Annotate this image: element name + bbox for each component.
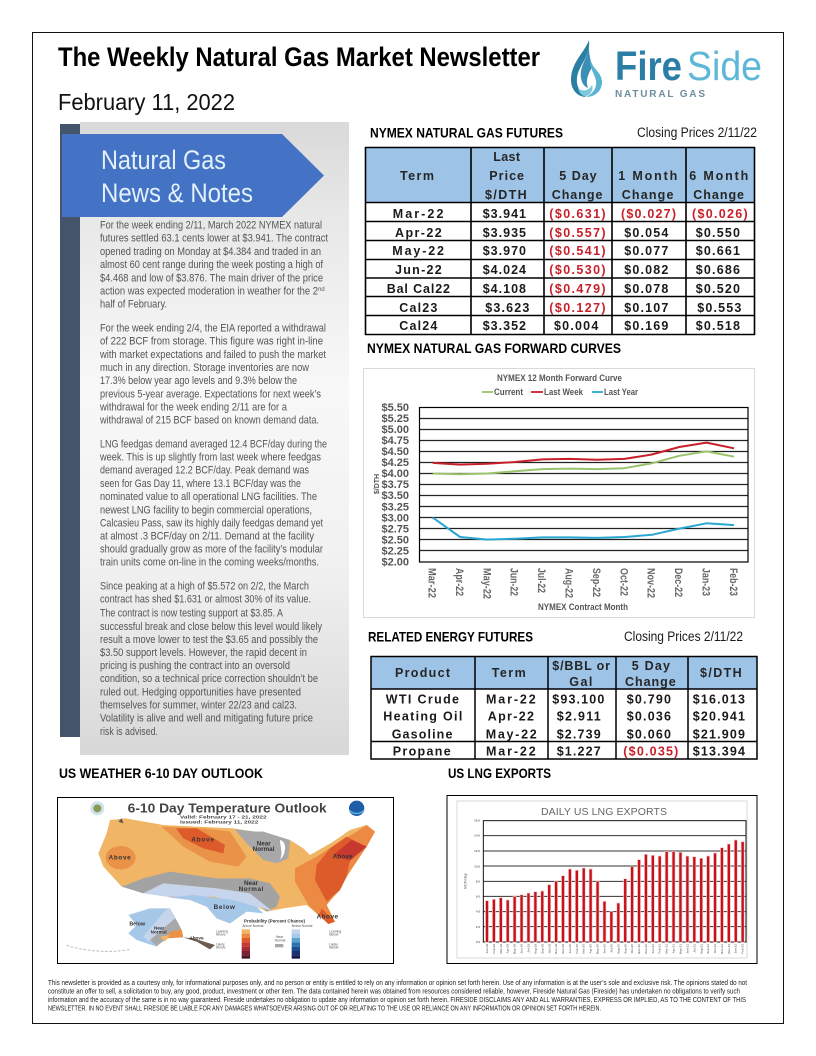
x axis month labels: Feb-21 bbox=[658, 944, 662, 954]
x axis month labels: Nov-19 bbox=[554, 944, 558, 954]
table rows: $93.100 bbox=[552, 692, 604, 706]
table rows: $0.082 bbox=[624, 263, 668, 277]
table rows: $0.661 bbox=[696, 244, 740, 258]
y axis labels: $2.00 bbox=[381, 556, 409, 568]
table rows: $0.078 bbox=[624, 282, 668, 296]
text block: LNG feedgas demand: week. This is up slightly from last week where feedgas bbox=[99, 452, 321, 464]
x axis month labels: Feb-22 bbox=[741, 944, 745, 954]
text block: LNG feedgas demand: newest LNG facility to begin commercial operations, bbox=[100, 504, 312, 516]
map region labels: Above bbox=[109, 855, 131, 862]
text block: LNG feedgas demand: should gradually grow as more of the facility’s modular bbox=[100, 544, 323, 556]
x axis month labels: Apr-20 bbox=[589, 944, 593, 953]
map region labels: Below bbox=[214, 904, 235, 911]
x axis month labels: Feb-20 bbox=[575, 944, 579, 954]
map probability legend: Above bbox=[216, 945, 226, 949]
closing prices note: Closing Prices 2/11/22 bbox=[637, 125, 757, 140]
closing prices note: Closing Prices 2/11/22 bbox=[624, 629, 743, 644]
map title: Issued: February 11, 2022 bbox=[180, 819, 259, 825]
chart title: NYMEX 12 Month Forward Curve bbox=[497, 373, 622, 384]
table rows: ($0.027) bbox=[621, 207, 676, 221]
text block: storage report: previous 5-year average. Expectations for next week’s bbox=[100, 388, 321, 400]
text block: weekly settlement: $4.468 and low of $3.876. The main driver of the price bbox=[100, 272, 323, 284]
text block: LNG feedgas demand: at almost .3 BCF/day on 2/11. Demand at the facility bbox=[100, 530, 315, 542]
table rows: Propane bbox=[393, 744, 451, 758]
table rows: May-22 bbox=[392, 244, 444, 258]
table rows: Bal Cal22 bbox=[387, 282, 450, 296]
map region labels: Normal bbox=[253, 846, 275, 853]
map region labels: Above bbox=[189, 936, 204, 941]
map probability legend: Normal bbox=[275, 938, 286, 942]
x axis month labels: Jun-20 bbox=[602, 944, 606, 954]
text block: weekly settlement: nd bbox=[318, 287, 325, 293]
map region labels bbox=[109, 837, 353, 941]
heading: LNG exports: US LNG EXPORTS bbox=[448, 765, 551, 781]
y axis title: BCF/day bbox=[463, 873, 468, 889]
x axis month labels: Sep-20 bbox=[623, 944, 627, 954]
series: last week bbox=[433, 443, 734, 465]
table rows: $2.911 bbox=[557, 710, 601, 724]
x axis month labels: Aug-21 bbox=[699, 944, 703, 954]
x axis month labels: Jul-19 bbox=[526, 944, 530, 953]
chart legend: Last Week bbox=[544, 387, 584, 398]
y axis labels: $2.25 bbox=[381, 545, 409, 557]
icon: NOAA seal bbox=[349, 801, 364, 816]
y axis labels: 14.0 bbox=[474, 834, 480, 838]
table header: Term bbox=[492, 666, 526, 680]
y axis labels bbox=[474, 819, 480, 944]
x axis month labels: Apr-21 bbox=[672, 944, 676, 953]
text block: technical outlook: Since peaking at a high of $5.572 on 2/2, the March bbox=[100, 580, 309, 592]
map region labels: Above bbox=[317, 914, 338, 921]
text block: technical outlook: ruled out. Hedging opportunities have presented bbox=[100, 686, 301, 698]
table rows: ($0.631) bbox=[549, 207, 606, 221]
chart legend: Current bbox=[494, 387, 524, 398]
text block: technical outlook: contract has shed $1.631 or almost 30% of its value. bbox=[100, 594, 311, 606]
map probability legend: Leaning bbox=[216, 930, 228, 934]
map region labels: Near bbox=[154, 925, 165, 930]
table rows: $0.790 bbox=[627, 692, 671, 706]
x axis month labels bbox=[485, 944, 745, 954]
y axis labels: $5.50 bbox=[381, 402, 409, 414]
y axis labels: $3.00 bbox=[381, 512, 409, 524]
table header: 5 Day bbox=[559, 169, 597, 183]
table header bbox=[400, 150, 748, 202]
x axis month labels: Oct-20 bbox=[630, 944, 634, 953]
table rows: $3.970 bbox=[483, 244, 526, 258]
icon: flame bbox=[571, 40, 602, 97]
x axis month labels: Oct-21 bbox=[713, 944, 717, 953]
table rows: Jun-22 bbox=[395, 263, 442, 277]
table header: $/BBL or bbox=[552, 659, 610, 673]
map region labels: Normal bbox=[151, 930, 167, 935]
text block: storage report: much in any direction. Storage inventories are now bbox=[100, 362, 309, 374]
table: related energy futures bbox=[370, 656, 758, 760]
table: NYMEX natural gas futures bbox=[365, 147, 755, 335]
table rows: ($0.035) bbox=[623, 744, 678, 758]
x axis month labels: Jun-19 bbox=[520, 944, 524, 954]
table rows: ($0.557) bbox=[549, 226, 606, 240]
map title: Valid: February 17 - 21, 2022 bbox=[180, 815, 267, 821]
table header: Product bbox=[395, 666, 451, 680]
series: last year bbox=[433, 518, 734, 540]
x axis month labels: Aug-20 bbox=[616, 944, 620, 954]
x axis month labels: Nov-20 bbox=[637, 944, 641, 954]
table rows: ($0.026) bbox=[692, 207, 748, 221]
map title: 6-10 Day Temperature Outlook bbox=[128, 801, 327, 816]
table rows bbox=[383, 692, 745, 758]
map title bbox=[128, 801, 327, 825]
table rows: Apr-22 bbox=[488, 710, 534, 724]
text block: weekly settlement: almost 60 cent range during the week posting a high of bbox=[100, 259, 323, 271]
y axis labels: 0.0 bbox=[476, 940, 480, 944]
y axis labels: $3.75 bbox=[381, 479, 409, 491]
table rows: $0.553 bbox=[697, 301, 741, 315]
table rows: $16.013 bbox=[693, 692, 745, 706]
table rows: $0.036 bbox=[627, 710, 671, 724]
table header bbox=[395, 659, 742, 689]
text block: weekly settlement: For the week ending 2/11, March 2022 NYMEX natural bbox=[100, 220, 322, 232]
text block: technical outlook: pricing is pushing the contract into an oversold bbox=[100, 660, 290, 672]
y axis labels: $4.50 bbox=[381, 446, 409, 458]
banner arrow: News & Notes bbox=[101, 178, 253, 208]
x axis month labels: Dec-21 bbox=[727, 944, 731, 954]
text block: storage report bbox=[99, 322, 326, 427]
table rows: $3.935 bbox=[483, 226, 526, 240]
table rows: Mar-22 bbox=[393, 207, 443, 221]
text block: technical outlook: $3.50 support levels. However, the rapid decent in bbox=[100, 647, 307, 659]
x axis month labels: Apr-22 bbox=[453, 568, 465, 596]
y axis labels: $4.75 bbox=[381, 435, 409, 447]
table header: 1 Month bbox=[618, 169, 677, 183]
table header: Change bbox=[552, 188, 602, 202]
map probability legend: Below Normal bbox=[292, 924, 313, 928]
table rows: Apr-22 bbox=[395, 226, 442, 240]
bars bbox=[486, 840, 744, 942]
table rows bbox=[387, 207, 748, 333]
text block: storage report: of 222 BCF from storage. This figure was right in-line bbox=[100, 336, 323, 348]
table rows: Gasoline bbox=[392, 728, 452, 742]
x axis month labels: Oct-22 bbox=[617, 568, 629, 596]
x axis month labels: Jul-21 bbox=[692, 944, 696, 953]
table rows: $0.107 bbox=[624, 301, 668, 315]
line chart: NYMEX 12 month forward curve bbox=[364, 368, 754, 618]
table rows: Cal23 bbox=[399, 301, 437, 315]
disclaimer: NEWSLETTER. IN NO EVENT SHALL FIRESIDE BE LIABLE FOR ANY DAMAGES WHATSOEVER ARISING OUT OF OR RELATING TO THE USE OR RELIANCE ON ANY INFORMATION OR OPINION SET FORTH HEREIN. bbox=[48, 1004, 601, 1012]
text block: technical outlook: risk is advised. bbox=[100, 726, 158, 738]
table rows: $20.941 bbox=[693, 710, 745, 724]
table rows: $4.024 bbox=[483, 263, 526, 277]
y axis labels: 8.0 bbox=[476, 879, 480, 883]
table rows: $0.550 bbox=[696, 226, 740, 240]
heading: weather outlook: US WEATHER 6-10 DAY OUTLOOK bbox=[59, 765, 263, 781]
x axis title: NYMEX Contract Month bbox=[538, 602, 628, 613]
table header: 6 Month bbox=[689, 169, 748, 183]
heading: NYMEX futures: NYMEX NATURAL GAS FUTURES bbox=[370, 124, 563, 140]
logo: FireSide Natural Gas: NATURAL GAS bbox=[615, 89, 705, 100]
text block: technical outlook: Volatility is alive and well and mitigating future price bbox=[100, 713, 313, 725]
table rows: ($0.127) bbox=[549, 301, 606, 315]
text block: LNG feedgas demand: LNG feedgas demand averaged 12.4 BCF/day during the bbox=[100, 438, 327, 450]
x axis month labels: Nov-21 bbox=[720, 944, 724, 954]
table rows: ($0.541) bbox=[549, 244, 606, 258]
table rows: $4.108 bbox=[483, 282, 526, 296]
banner arrow: Natural Gas bbox=[101, 145, 226, 175]
heading: related energy futures: RELATED ENERGY FUTURES bbox=[368, 628, 533, 644]
x axis month labels: Mar-21 bbox=[665, 944, 669, 954]
y axis labels: 4.0 bbox=[476, 910, 480, 914]
table rows: $0.520 bbox=[696, 282, 740, 296]
table rows: $0.060 bbox=[627, 728, 671, 742]
map: Alaska bbox=[67, 908, 215, 951]
table rows: $3.941 bbox=[483, 207, 526, 221]
text block: LNG feedgas demand: seen for Gas Day 11, where 13.1 BCF/day was the bbox=[100, 478, 301, 490]
table rows: Heating Oil bbox=[383, 710, 462, 724]
x axis month labels: Dec-20 bbox=[644, 944, 648, 954]
table header: Last bbox=[493, 150, 521, 164]
y axis title: $/DTH bbox=[374, 474, 381, 494]
table rows: $13.394 bbox=[693, 744, 745, 758]
icon: NWS seal bbox=[90, 801, 104, 815]
x axis month labels: Dec-19 bbox=[561, 944, 565, 954]
map: 6-10 day temperature outlook bbox=[58, 798, 394, 964]
x axis month labels: Jul-20 bbox=[609, 944, 613, 953]
x axis month labels: Jan-21 bbox=[651, 944, 655, 953]
table rows: WTI Crude bbox=[386, 692, 459, 706]
x axis month labels: Jan-23 bbox=[699, 568, 711, 596]
y axis labels bbox=[381, 402, 409, 568]
map probability legend: Above bbox=[216, 933, 226, 937]
x axis month labels: Aug-22 bbox=[562, 568, 574, 598]
map: contiguous states bbox=[98, 818, 375, 924]
y axis labels: 6.0 bbox=[476, 895, 480, 899]
map probability legend: Below bbox=[329, 945, 339, 949]
table header: $/DTH bbox=[485, 188, 527, 202]
chart legend bbox=[482, 387, 638, 398]
map region labels: Near bbox=[244, 880, 259, 887]
y axis labels: $5.25 bbox=[381, 413, 409, 425]
text block: storage report: with market expectations and failed to push the market bbox=[99, 349, 326, 361]
table header: $/DTH bbox=[700, 666, 742, 680]
x axis month labels: Nov-22 bbox=[645, 568, 657, 598]
table rows: $0.518 bbox=[696, 319, 740, 333]
text block: technical outlook bbox=[100, 580, 323, 738]
table rows: May-22 bbox=[486, 728, 537, 742]
text block: weekly settlement: opened trading on Monday at $4.384 and traded in an bbox=[100, 246, 321, 258]
text block: technical outlook: result a move lower to test the $3.65 and possibly the bbox=[100, 634, 318, 646]
y axis labels: $3.25 bbox=[381, 501, 409, 513]
text block: weekly settlement bbox=[100, 220, 328, 311]
x axis month labels: Jan-19 bbox=[485, 944, 489, 953]
table rows: $0.004 bbox=[554, 319, 598, 333]
x axis month labels: Jul-22 bbox=[535, 568, 547, 593]
series: current bbox=[433, 451, 734, 474]
title: The Weekly Natural Gas Market Newsletter bbox=[58, 42, 540, 72]
map probability legend: Probability (Percent Chance) bbox=[244, 919, 306, 924]
text block: storage report: withdrawal of 215 BCF based on known demand data. bbox=[99, 415, 319, 427]
chart legend: Last Year bbox=[604, 387, 638, 398]
map probability legend: Near bbox=[276, 935, 284, 939]
text block: technical outlook: The contract is now testing support at $3.85. A bbox=[100, 608, 284, 620]
x axis month labels: Oct-19 bbox=[547, 944, 551, 953]
text block: LNG feedgas demand: demand averaged 12.2 BCF/day. Peak demand was bbox=[100, 465, 309, 477]
map region labels: Above bbox=[333, 854, 353, 861]
text block: LNG feedgas demand: Calcasieu Pass, saw its highly daily feedgas demand yet bbox=[100, 517, 323, 529]
disclaimer bbox=[48, 978, 748, 1012]
y axis labels: $4.00 bbox=[381, 468, 409, 480]
table rows: $1.227 bbox=[557, 744, 601, 758]
y axis labels: $5.00 bbox=[381, 424, 409, 436]
table header: Change bbox=[622, 188, 673, 202]
x axis month labels: Sep-21 bbox=[706, 944, 710, 954]
table header: Gal bbox=[569, 675, 592, 689]
table rows: $2.739 bbox=[557, 728, 601, 742]
y axis labels: 10.0 bbox=[474, 864, 480, 868]
text block: LNG feedgas demand: train units come on-line in the coming weeks/months. bbox=[100, 556, 319, 568]
table rows: $0.686 bbox=[696, 263, 740, 277]
map probability legend: Leaning bbox=[329, 930, 341, 934]
text block: LNG feedgas demand bbox=[99, 438, 327, 568]
map probability legend: Likely bbox=[216, 942, 225, 946]
y axis labels: $3.50 bbox=[381, 490, 409, 502]
table rows: $21.909 bbox=[693, 728, 745, 742]
x axis month labels: May-19 bbox=[513, 944, 517, 954]
map region labels: Normal bbox=[239, 886, 264, 893]
map region labels: Near bbox=[257, 841, 271, 848]
table rows: $0.054 bbox=[624, 226, 668, 240]
text block: storage report: 17.3% below year ago levels and 9.3% below the bbox=[100, 375, 297, 387]
x axis month labels: Jan-20 bbox=[568, 944, 572, 953]
map region labels: Below bbox=[129, 922, 146, 928]
table rows: $0.077 bbox=[624, 244, 668, 258]
panel: natural gas news and notes bbox=[60, 122, 349, 755]
table rows: ($0.479) bbox=[549, 282, 606, 296]
x axis month labels: Sep-22 bbox=[590, 568, 602, 597]
y axis labels: 12.0 bbox=[474, 849, 480, 853]
logo: FireSide Natural Gas: Side bbox=[687, 43, 762, 89]
x axis month labels: Jan-22 bbox=[734, 944, 738, 953]
text block: technical outlook: successful break and close below this level would likely bbox=[100, 621, 323, 633]
logo: FireSide Natural Gas bbox=[571, 40, 762, 100]
map probability legend: Above Normal bbox=[242, 924, 264, 928]
table rows: Mar-22 bbox=[486, 744, 536, 758]
x axis month labels: Aug-19 bbox=[533, 944, 537, 954]
date: February 11, 2022 bbox=[58, 89, 235, 115]
x axis month labels: Dec-22 bbox=[672, 568, 684, 597]
text block: storage report: withdrawal for the week ending 2/11 are for a bbox=[99, 402, 287, 414]
text block: weekly settlement: half of February. bbox=[100, 299, 167, 311]
logo: FireSide Natural Gas: Fire bbox=[615, 43, 682, 89]
text block: technical outlook: themselves for summer, winter 22/23 and cal23. bbox=[100, 700, 297, 712]
x axis month labels: May-22 bbox=[480, 568, 492, 599]
map probability legend bbox=[216, 919, 341, 959]
text block: technical outlook: condition, so a technical price correction shouldn’t be bbox=[100, 673, 318, 685]
x axis month labels: Jun-21 bbox=[685, 944, 689, 954]
table rows: ($0.530) bbox=[549, 263, 606, 277]
table rows: Cal24 bbox=[399, 319, 437, 333]
x axis month labels: Mar-20 bbox=[582, 944, 586, 954]
bar chart: daily US LNG exports bbox=[447, 796, 757, 964]
text block: weekly settlement: action was expected moderation in weather for the 2 bbox=[100, 286, 318, 298]
x axis month labels: Mar-19 bbox=[499, 944, 503, 954]
table rows: $3.623 bbox=[485, 301, 529, 315]
y axis labels: $2.50 bbox=[381, 534, 409, 546]
y axis labels: $2.75 bbox=[381, 523, 409, 535]
x axis month labels: Feb-23 bbox=[727, 568, 739, 596]
text block: storage report: For the week ending 2/4, the EIA reported a withdrawal bbox=[100, 322, 326, 334]
chart title: DAILY US LNG EXPORTS bbox=[541, 806, 667, 818]
map region labels: Above bbox=[191, 837, 214, 844]
text block: LNG feedgas demand: nominated value to all operational LNG facilities. The bbox=[100, 491, 317, 503]
x axis month labels: Feb-19 bbox=[492, 944, 496, 954]
table header: Change bbox=[625, 675, 676, 689]
x axis month labels bbox=[426, 568, 739, 599]
x axis month labels: Mar-22 bbox=[426, 568, 438, 598]
table rows: Mar-22 bbox=[486, 692, 536, 706]
table header: 5 Day bbox=[632, 659, 670, 673]
heading: forward curves: NYMEX NATURAL GAS FORWARD CURVES bbox=[367, 340, 621, 356]
x axis month labels: May-21 bbox=[678, 944, 682, 954]
map probability legend: Likely bbox=[329, 942, 338, 946]
y axis labels: 2.0 bbox=[476, 925, 480, 929]
x axis month labels: Jun-22 bbox=[508, 568, 520, 596]
x axis month labels: Sep-19 bbox=[540, 944, 544, 954]
x axis month labels: May-20 bbox=[596, 944, 600, 954]
table rows: $0.169 bbox=[624, 319, 668, 333]
x axis month labels: Apr-19 bbox=[506, 944, 510, 953]
text block: weekly settlement: futures settled 63.1 cents lower at $3.941. The contract bbox=[100, 233, 328, 245]
y axis labels: $4.25 bbox=[381, 457, 409, 469]
banner arrow bbox=[62, 134, 324, 217]
table rows: $3.352 bbox=[483, 319, 526, 333]
y axis labels: 16.0 bbox=[474, 819, 480, 823]
table header: Change bbox=[693, 188, 744, 202]
table header: Price bbox=[489, 169, 524, 183]
map probability legend: Below bbox=[329, 933, 339, 937]
table header: Term bbox=[400, 169, 434, 183]
